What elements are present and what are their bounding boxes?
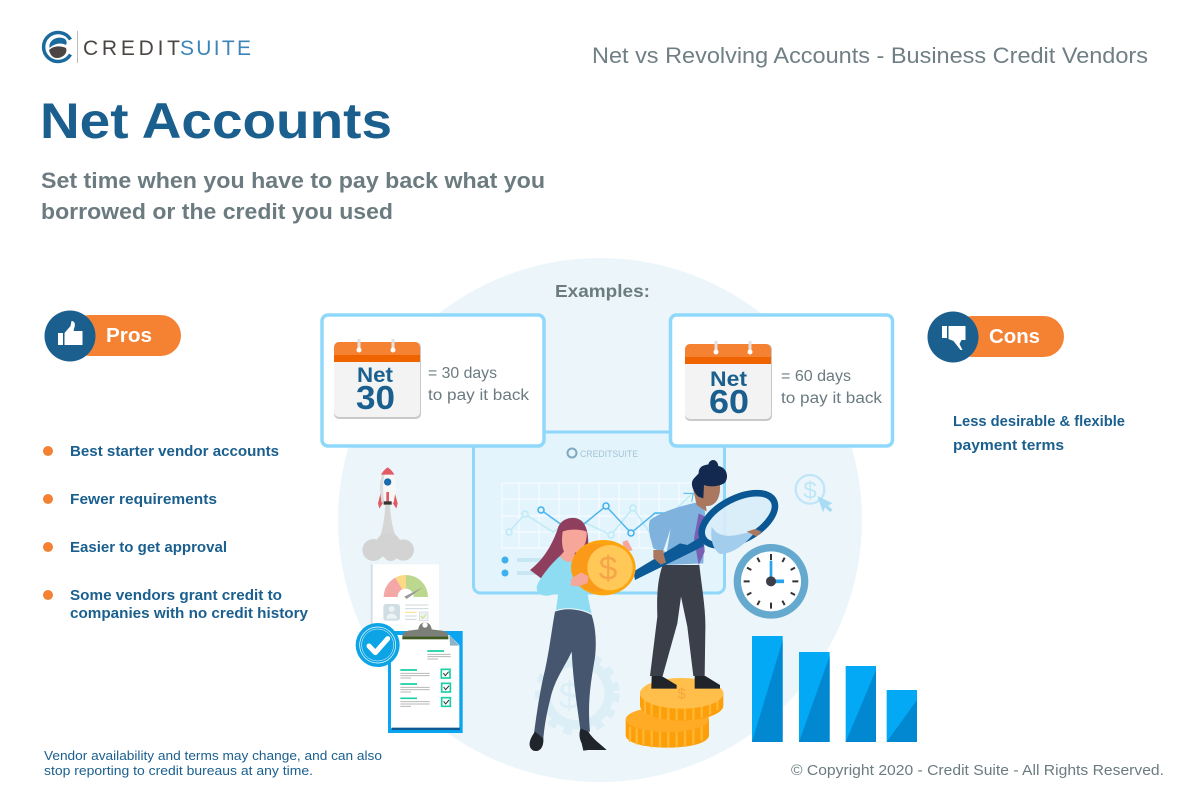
- trousers: [650, 565, 705, 676]
- monitor with chart: CREDITSUITE: [580, 449, 638, 460]
- example card: net 60: = 60 days: [781, 368, 851, 385]
- icon: dollar cursor: [796, 475, 833, 512]
- background circle: [338, 258, 862, 782]
- icon: calendar net 60: Net: [710, 368, 747, 391]
- hair: [530, 518, 588, 580]
- icon: rocket: [362, 467, 414, 561]
- icon: clock: [734, 544, 808, 619]
- header subtitle: Net vs Revolving Accounts - Business Credit Vendors: [592, 43, 1148, 68]
- icon: calendar net 30: [334, 339, 421, 419]
- icon: gear with dollar: [538, 654, 616, 732]
- cons badge: [928, 312, 1064, 362]
- icon: thumbs down: [942, 326, 966, 350]
- magnifier handle: [633, 537, 704, 580]
- face: [560, 530, 587, 562]
- example card: net 30: = 30 days: [428, 365, 497, 382]
- example card: net 30: [322, 315, 544, 446]
- bar chart: [752, 636, 917, 742]
- hair: [692, 460, 727, 498]
- icon: calendar net 60: [685, 341, 772, 421]
- footnote: Vendor availability and terms may change, and can also: [44, 749, 382, 763]
- icon: credit score report: [371, 564, 439, 631]
- pros list: companies with no credit history: [70, 606, 308, 622]
- sleeve behind lens: [711, 527, 757, 554]
- icon: check badge: [356, 623, 400, 667]
- description: borrowed or the credit you used: [41, 199, 393, 224]
- magnifier lens: [693, 482, 783, 556]
- far hand: [747, 529, 762, 537]
- pros list: Fewer requirements: [70, 492, 217, 508]
- icon: coin stack: [626, 678, 723, 748]
- pros badge: [44, 310, 181, 362]
- illustration: woman with coin: [530, 518, 636, 751]
- logo: SUITE: [180, 37, 251, 60]
- description: [41, 168, 545, 224]
- shoes: [651, 676, 720, 689]
- face: [693, 483, 720, 512]
- footnote: stop reporting to credit bureaus at any time.: [44, 764, 313, 778]
- cons badge: Cons: [989, 326, 1040, 348]
- example card: net 60: [670, 315, 892, 446]
- coin: $: [599, 550, 617, 587]
- illustration: right objects: [626, 460, 917, 748]
- pros badge: Pros: [106, 325, 152, 347]
- man with magnifying glass: [633, 460, 783, 689]
- logo: [44, 31, 251, 63]
- logo: CREDIT: [83, 37, 180, 60]
- monitor with chart: [474, 432, 724, 593]
- decorative arrow in chart: [653, 493, 693, 513]
- illustration: left objects: [356, 467, 616, 733]
- coin: [571, 540, 636, 595]
- cons list: payment terms: [953, 438, 1064, 454]
- icon: coin stack: $: [677, 685, 686, 702]
- cons list: Less desirable & flexible: [953, 414, 1125, 430]
- icon: calendar net 30: Net: [357, 364, 393, 387]
- near hand: [571, 572, 589, 586]
- shoes: [530, 728, 607, 751]
- pros list: Some vendors grant credit to: [70, 588, 282, 604]
- icon: gear with dollar: $: [559, 675, 580, 718]
- icon: calendar net 60: 60: [709, 383, 749, 420]
- shirt: [649, 502, 705, 565]
- example card: net 30: to pay it back: [428, 387, 529, 404]
- tie: [694, 513, 705, 565]
- hand: [653, 550, 666, 565]
- cons list: [953, 414, 1125, 454]
- shirt gap: [663, 528, 671, 553]
- icon: dollar cursor: $: [803, 477, 817, 504]
- icon: clipboard checklist: [388, 622, 463, 733]
- pros list: [43, 444, 308, 622]
- icon: calendar net 30: 30: [356, 379, 395, 416]
- icon: thumbs up: [58, 321, 82, 345]
- example card: net 60: to pay it back: [781, 390, 882, 407]
- title: Net Accounts: [40, 93, 392, 149]
- trousers: [533, 609, 596, 738]
- footnote: [44, 749, 382, 778]
- description: Set time when you have to pay back what you: [41, 168, 545, 193]
- far hand: [623, 540, 633, 553]
- shirt: [537, 556, 592, 614]
- pros list: Easier to get approval: [70, 540, 227, 556]
- copyright: © Copyright 2020 - Credit Suite - All Rights Reserved.: [791, 763, 1164, 779]
- examples heading: Examples:: [555, 281, 650, 301]
- pros list: Best starter vendor accounts: [70, 444, 279, 460]
